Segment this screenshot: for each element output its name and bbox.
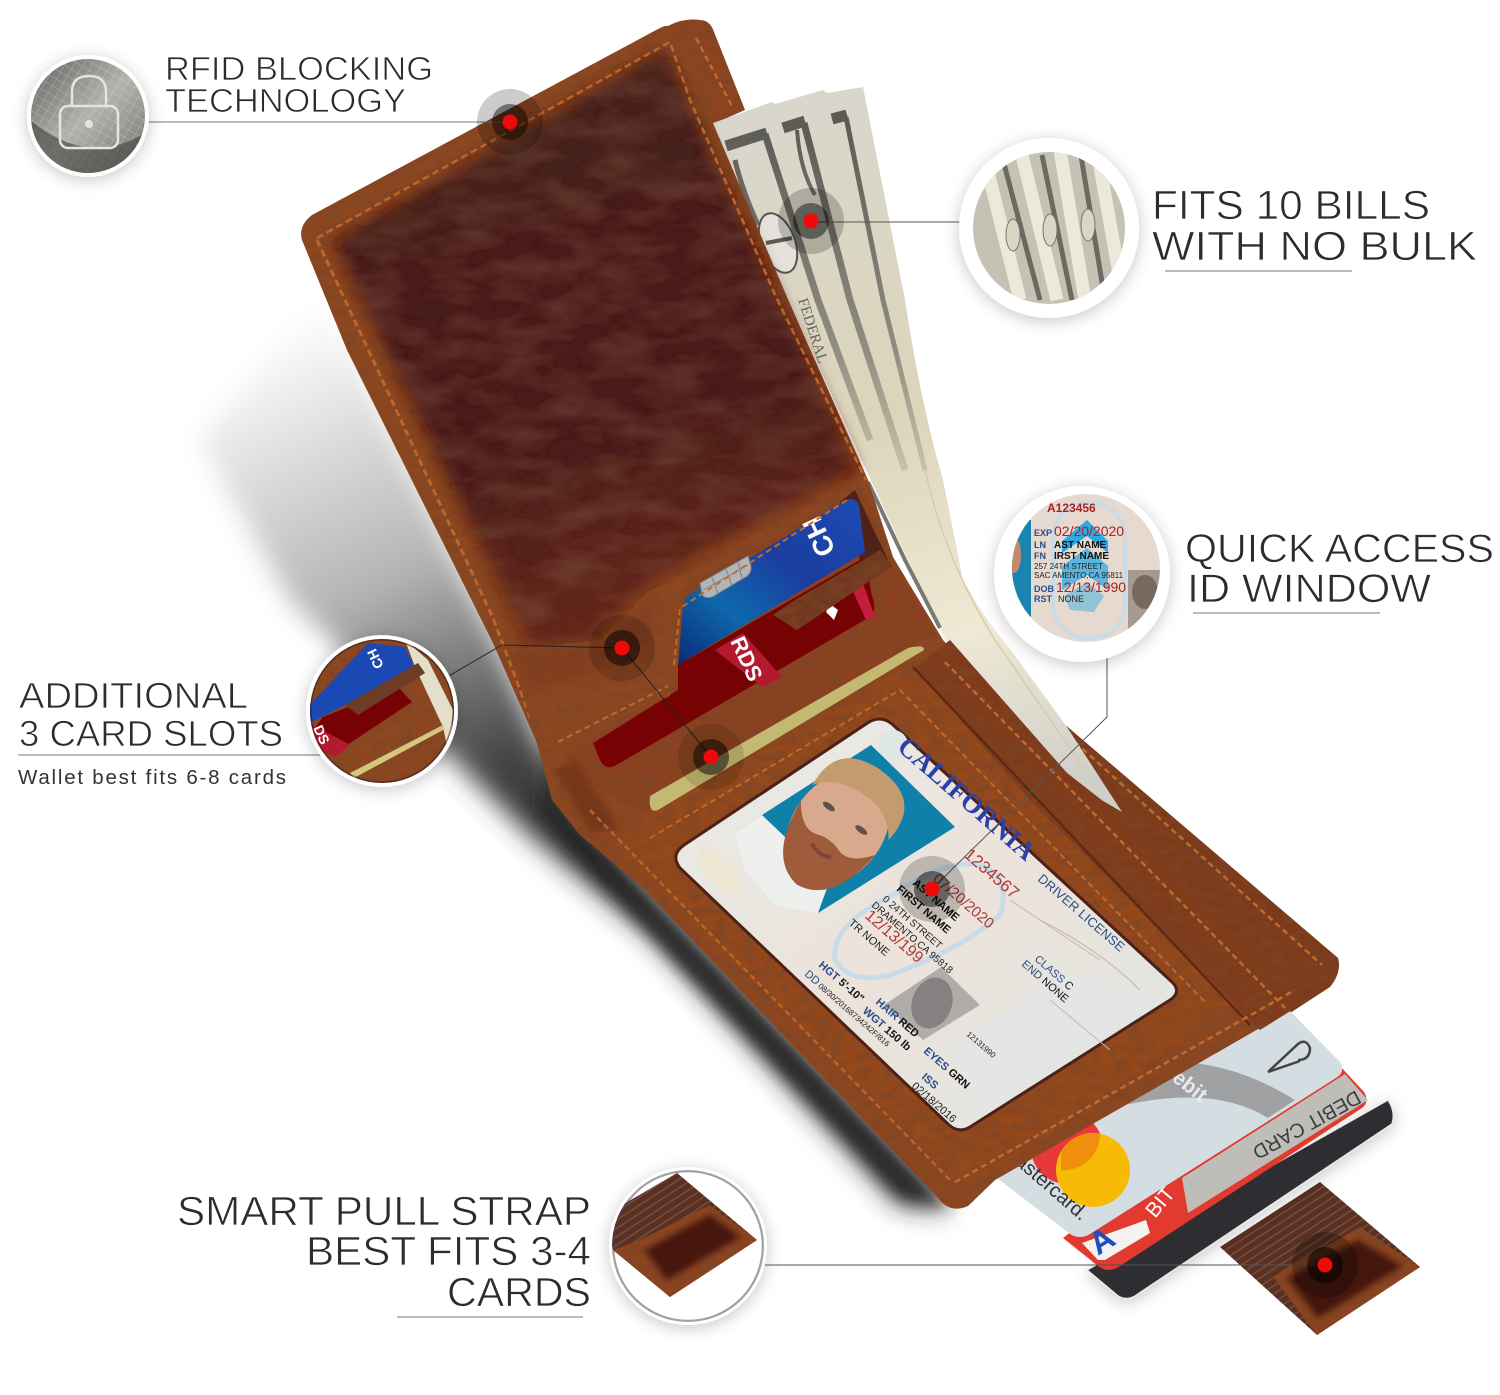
lower panel with ID window: [590, 640, 1300, 1190]
red card: [593, 557, 875, 767]
debit card red and silver: BIT: [1141, 1182, 1180, 1222]
ID window: CLASS C: [1032, 953, 1075, 993]
callout circle: ID window: NONE: [1058, 594, 1084, 604]
back leather strip: [640, 20, 1339, 1013]
callout circle: ID window: RST: [1034, 594, 1053, 604]
marker: RFID: [477, 89, 543, 155]
pull strap: [1220, 1182, 1420, 1335]
heading: smart pull strap: BEST FITS 3-4: [306, 1228, 591, 1274]
ID window: DRAMENTO,CA 95818: [869, 900, 955, 977]
callout circle: pull strap: [605, 1167, 767, 1325]
callout circle: ID window: 02/20/2020: [1054, 523, 1124, 539]
ID window: TR NONE: [846, 917, 891, 959]
ID window: 12131990: [965, 1030, 998, 1060]
silver mastercard: astercard.: [1011, 1150, 1092, 1225]
heading: RFID blocking technology: [165, 50, 433, 119]
small leather tab: [773, 550, 892, 630]
callout circle: ID window: AST NAME: [1054, 540, 1107, 551]
blue card: [678, 499, 865, 665]
leader lines: [18, 122, 1380, 1317]
ID window: 1234567: [960, 845, 1023, 902]
banknotes: [713, 87, 1122, 812]
ID window: END NONE: [1019, 958, 1071, 1005]
callout circle: ID window: 257 24TH STREET: [1034, 562, 1103, 571]
debit cards and pull strap sticking out: [997, 1008, 1420, 1335]
heading: additional card slots: 3 CARD SLOTS: [19, 713, 283, 754]
ID window: AST NAME: [910, 877, 961, 924]
ID window: 02/18/2016: [909, 1080, 958, 1125]
upper flap dark interior: [317, 42, 866, 743]
heading: fits 10 bills: FITS 10 BILLS: [1152, 182, 1430, 228]
callout circle: RFID lock: [27, 55, 150, 180]
black card: [1087, 1100, 1393, 1299]
marker: tan card slot: [678, 724, 744, 790]
heading: additional card slots: [18, 675, 286, 789]
callout circle: ID window: EXP: [1034, 528, 1052, 538]
ID window: 07/20/2020: [929, 870, 997, 932]
silver mastercard: [997, 1008, 1342, 1237]
callout circle: bills: [959, 138, 1139, 318]
debit card red and silver: DEBIT CARD: [1249, 1086, 1364, 1163]
heading: quick access ID window: QUICK ACCESS: [1185, 527, 1494, 571]
marker: ID window: [899, 856, 965, 922]
ID window: ISS: [919, 1071, 940, 1092]
marker: bills: [778, 188, 844, 254]
ID window: 0 24TH STREET: [880, 894, 944, 951]
ID window: HAIR RED: [873, 996, 921, 1040]
ID window: DD 08/30/20168734242F/816: [802, 968, 893, 1050]
heading: quick access ID window: ID WINDOW: [1187, 567, 1431, 611]
callout circle: additional card slots: DS: [310, 723, 333, 747]
banknotes: FEDERAL: [794, 296, 830, 365]
ID portrait: [734, 742, 955, 913]
ID window: FIRST NAME: [894, 883, 953, 936]
ID window: EYES GRN: [921, 1045, 972, 1092]
callout circle: additional card slots: CH: [364, 646, 387, 671]
heading: additional card slots: ADDITIONAL: [19, 675, 248, 716]
tan card: [650, 646, 924, 811]
red card: RDS: [725, 633, 768, 685]
ID window: HGT 5'-10": [816, 959, 866, 1005]
blue card: CH: [796, 512, 841, 562]
marker: card slot flap: [589, 615, 655, 681]
callout circle: ID window: [994, 486, 1170, 662]
heading: smart pull strap: SMART PULL STRAP: [177, 1188, 591, 1234]
ID window: 12/13/199: [861, 907, 926, 967]
pocket recess: [566, 488, 935, 812]
card pocket: [510, 488, 935, 832]
debit card red and silver: A: [1082, 1219, 1121, 1262]
marker: strap: [1292, 1232, 1358, 1298]
ID window: WGT 150 lb: [860, 1005, 913, 1054]
callout circle: additional card slots: [300, 635, 465, 795]
callout circle: ID window: FN: [1034, 551, 1046, 561]
note: wallet best fits: Wallet best fits 6-8 cards: [18, 766, 286, 789]
heading: RFID blocking technology: TECHNOLOGY: [165, 82, 406, 119]
ID window: [676, 719, 1177, 1130]
heading: RFID blocking technology: RFID BLOCKING: [165, 50, 433, 87]
flap lower lip: [510, 578, 681, 750]
wallet cast shadow: [200, 290, 950, 1210]
callout circle: ID window: IRST NAME: [1054, 551, 1109, 562]
heading: smart pull strap: CARDS: [447, 1269, 591, 1315]
callout circle: ID window: 12/13/1990: [1056, 579, 1126, 595]
heading: quick access ID window: [1185, 527, 1494, 611]
silver mastercard: debit: [1158, 1058, 1212, 1107]
ID window: DRIVER LICENSE: [1035, 871, 1128, 955]
callout circle: ID window: A123456: [1047, 501, 1096, 515]
debit card red and silver: [1063, 1050, 1368, 1270]
callout circle: ID window: SAC AMENTO,CA 95811: [1034, 571, 1124, 580]
callout circle: ID window: LN: [1034, 540, 1046, 550]
callout circle: ID window: DOB: [1034, 584, 1054, 594]
heading: smart pull strap: [177, 1188, 591, 1315]
heading: fits 10 bills: [1152, 182, 1477, 269]
ID window: CALIFORNIA: [892, 731, 1042, 867]
wallet leather body: [301, 26, 1300, 1209]
heading: fits 10 bills: WITH NO BULK: [1152, 223, 1477, 269]
